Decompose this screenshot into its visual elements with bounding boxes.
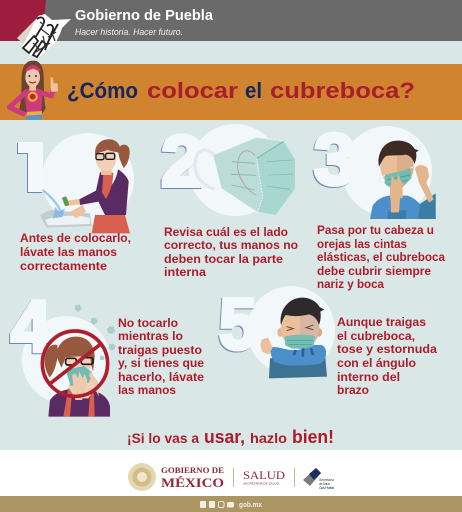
- step 5 text: interno del: [337, 371, 400, 384]
- step 1 text: lávate las manos: [20, 246, 117, 259]
- step 5 numeral: 5: [218, 286, 256, 366]
- step 4 text: y, si tienes que: [118, 357, 205, 370]
- title band: [0, 64, 462, 120]
- step 4 text: hacerlo, lávate: [118, 371, 205, 384]
- step 3 text: [317, 224, 446, 291]
- step 2 text: correcto, tus manos no: [164, 239, 298, 252]
- step 5 text: el cubreboca,: [337, 330, 415, 343]
- panel: step 1: [17, 133, 134, 270]
- footer link: gob.mx: [239, 502, 262, 509]
- illustration: man sneezing into elbow: [260, 298, 327, 378]
- step 2 text: interna: [164, 266, 207, 279]
- closing slogan: usar,: [204, 427, 245, 447]
- illustration: woman touching mask with prohibition sign: [42, 331, 110, 417]
- title: cubreboca?: [270, 78, 415, 103]
- step 4 circle: [22, 316, 110, 404]
- step 2 numeral: 2: [160, 123, 202, 203]
- step 2 text: Revisa cuál es el lado: [164, 226, 288, 239]
- step 3 numeral: 3: [313, 121, 354, 201]
- step 3 text: Pasa por tu cabeza u: [317, 224, 434, 237]
- title: ¿Cómo: [67, 78, 138, 103]
- Salud logo: SALUD: [243, 468, 285, 482]
- illustration: boy adjusting mask: [370, 141, 436, 219]
- Secretaría de Salud Puebla logo: Secretaría: [319, 478, 334, 482]
- step 4 text: [118, 317, 205, 397]
- step 1 numeral: 1: [4, 126, 54, 211]
- step 3 text: nariz y boca: [317, 278, 385, 291]
- closing slogan: ¡Si lo vas a: [127, 430, 199, 446]
- step 4 text: traigas puesto: [118, 344, 202, 357]
- step 5 text: con el ángulo: [337, 357, 416, 370]
- Gobierno de México logo: GOBIERNO DE: [161, 465, 224, 475]
- step 3 text: orejas las cintas: [317, 238, 407, 251]
- icons: virus particles: [75, 305, 115, 360]
- step 2 text: [164, 226, 298, 279]
- step 4 numeral: 4: [11, 287, 51, 367]
- illustration: face mask: [195, 137, 295, 215]
- step 3 circle: [342, 126, 432, 216]
- step 4 numeral: 4: [10, 288, 50, 368]
- icon: social media: [200, 501, 234, 508]
- title: el: [245, 78, 262, 103]
- step 5 text: [337, 316, 438, 397]
- step 4 text: mientras lo: [118, 330, 183, 343]
- panel: step 3: [313, 120, 446, 291]
- closing slogan: hazlo: [250, 430, 287, 446]
- icon: Puebla crest: [17, 14, 71, 58]
- closing slogan: bien!: [292, 427, 334, 447]
- Salud logo: SECRETARÍA DE SALUD: [243, 482, 280, 486]
- step 5 numeral: 5: [219, 285, 257, 365]
- step 1 numeral: 1: [3, 127, 53, 212]
- step 2 numeral: 2: [161, 122, 203, 202]
- step 3 numeral: 3: [314, 120, 355, 200]
- step 3 text: debe cubrir siempre: [317, 265, 432, 278]
- panel: step 2: [160, 122, 298, 279]
- panel: step 5: [218, 285, 438, 397]
- step 5 text: brazo: [337, 384, 369, 397]
- header title: Gobierno de Puebla: [75, 8, 214, 24]
- step 5 text: tose y estornuda: [337, 343, 438, 356]
- Gobierno de México logo: [161, 465, 224, 490]
- step 2 text: deben tocar la parte: [164, 253, 284, 266]
- Secretaría de Salud Puebla logo: de Salud: [319, 482, 330, 486]
- Secretaría de Salud Puebla logo: Gob. Puebla: [319, 486, 334, 490]
- step 1 text: [20, 232, 131, 273]
- illustration: woman washing hands: [40, 139, 130, 233]
- title: colocar: [147, 78, 238, 103]
- panel: step 4: [10, 287, 205, 417]
- step 1 text: correctamente: [20, 260, 108, 273]
- footer bar: [0, 496, 462, 512]
- step 4 text: No tocarlo: [118, 317, 178, 330]
- footer logos band: [0, 450, 462, 496]
- header slogan: Hacer historia. Hacer futuro.: [75, 27, 183, 38]
- Gobierno de México logo: MÉXICO: [161, 475, 224, 490]
- step 1 circle: [42, 133, 134, 225]
- step 4 text: las manos: [118, 384, 176, 397]
- step 1 numeral: [17, 142, 43, 193]
- step 3 text: elásticas, el cubreboca: [317, 251, 446, 264]
- step 5 text: Aunque traigas: [337, 316, 426, 329]
- step 2 circle: [189, 124, 281, 216]
- icon: national emblem: [128, 463, 156, 491]
- header band: [0, 0, 462, 41]
- step 1 text: Antes de colocarlo,: [20, 232, 131, 245]
- Secretaría de Salud Puebla logo: [303, 468, 334, 490]
- step 5 circle: [247, 286, 335, 374]
- icon: mascot woman: [9, 61, 58, 120]
